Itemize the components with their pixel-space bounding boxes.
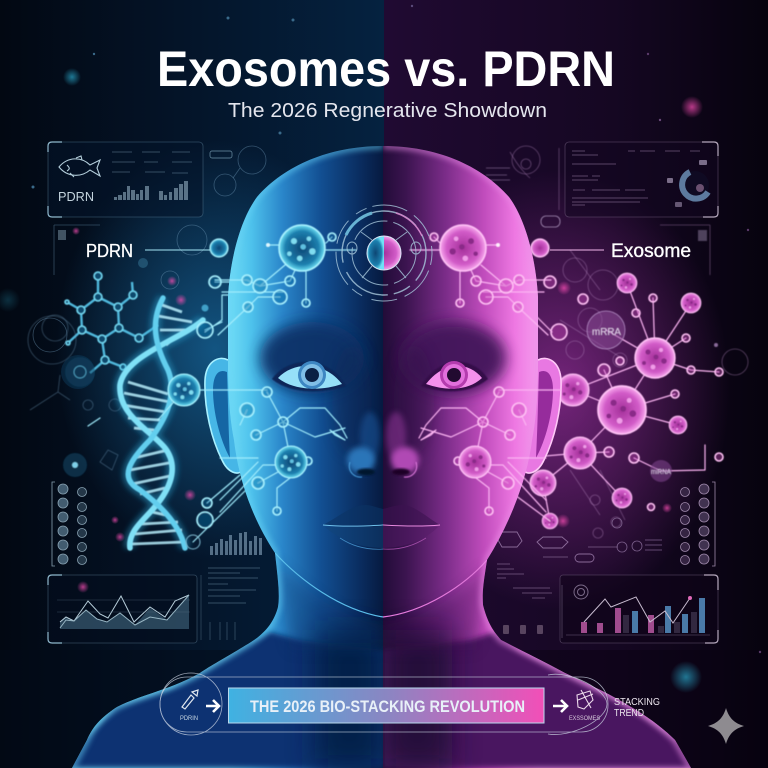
right ear <box>523 358 561 473</box>
label: stacking trend: STACKING <box>614 696 660 708</box>
banner bar: THE 2026 BIO-STACKING REVOLUTION <box>250 697 525 716</box>
label: stacking trend <box>614 696 660 719</box>
central split cell with target rings <box>336 205 432 301</box>
DNA double helix <box>120 298 203 548</box>
right exosome network <box>475 239 723 538</box>
arrow left <box>206 700 219 712</box>
label: miRNA bubble <box>650 460 672 482</box>
icon columns left <box>52 482 86 566</box>
eye socket shading right <box>402 322 506 394</box>
lips right <box>383 505 440 549</box>
label: PDRN with connector <box>86 241 210 261</box>
panel: right-center readouts <box>497 518 662 634</box>
label: EXSSOMES: EXSSOMES <box>569 715 601 722</box>
molecule: hexagonal structure <box>28 272 158 411</box>
banner bar <box>228 688 544 723</box>
arrow right <box>553 700 567 712</box>
lips <box>323 505 384 549</box>
jaw glow and chin line <box>275 553 383 617</box>
icon: pipette <box>182 690 198 709</box>
icon: sparkle <box>708 708 744 744</box>
title: Exosomes vs. PDRN <box>157 41 615 97</box>
mini bar charts <box>114 181 188 200</box>
small bar chart near neck <box>210 532 262 555</box>
right network faint background <box>486 146 748 375</box>
icon: exosome cluster <box>577 690 593 709</box>
banner: bio-stacking revolution <box>160 673 660 735</box>
label: PDRIN: PDRIN <box>180 715 198 722</box>
panel: top-left faint connection diagram <box>33 146 266 389</box>
pill outline <box>160 673 608 735</box>
panel: bottom-left area chart <box>48 575 197 643</box>
head circuits: blue <box>205 225 356 515</box>
icon: fish <box>59 156 100 177</box>
nose right <box>391 447 419 477</box>
panel: top-left PDRN source data <box>48 142 203 217</box>
right eye <box>421 361 488 391</box>
panel: top-right exosome data <box>565 142 718 217</box>
panel: bottom-right bar and line chart <box>560 575 718 643</box>
text block: bottom-center-left readouts <box>201 568 260 640</box>
label: stacking trend: TREND <box>614 707 644 719</box>
label: mRRA bubble: mRRA <box>592 327 621 338</box>
dna strand two <box>128 298 185 548</box>
head circuits: magenta <box>410 225 561 515</box>
left ear <box>205 358 243 473</box>
subtitle: The 2026 Regnerative Showdown <box>228 100 547 122</box>
left molecular network <box>63 239 267 549</box>
dna rungs <box>123 305 192 544</box>
label: miRNA bubble: miRNA <box>651 469 671 476</box>
label: Exosome with connector: Exosome <box>611 241 691 262</box>
right chin line <box>383 560 487 617</box>
eye socket shading <box>260 322 364 394</box>
head: blue half <box>50 140 384 768</box>
head: magenta half <box>383 140 715 768</box>
donut chart <box>681 171 709 199</box>
label: mRRA bubble <box>587 311 625 349</box>
nose <box>347 447 375 477</box>
label: PDRN with connector: PDRN <box>86 241 133 261</box>
icon columns right <box>680 482 715 566</box>
label: PDRN small: PDRN <box>58 189 94 204</box>
left eye <box>272 361 346 391</box>
dna glow <box>120 298 203 548</box>
dna strand one <box>120 320 203 548</box>
